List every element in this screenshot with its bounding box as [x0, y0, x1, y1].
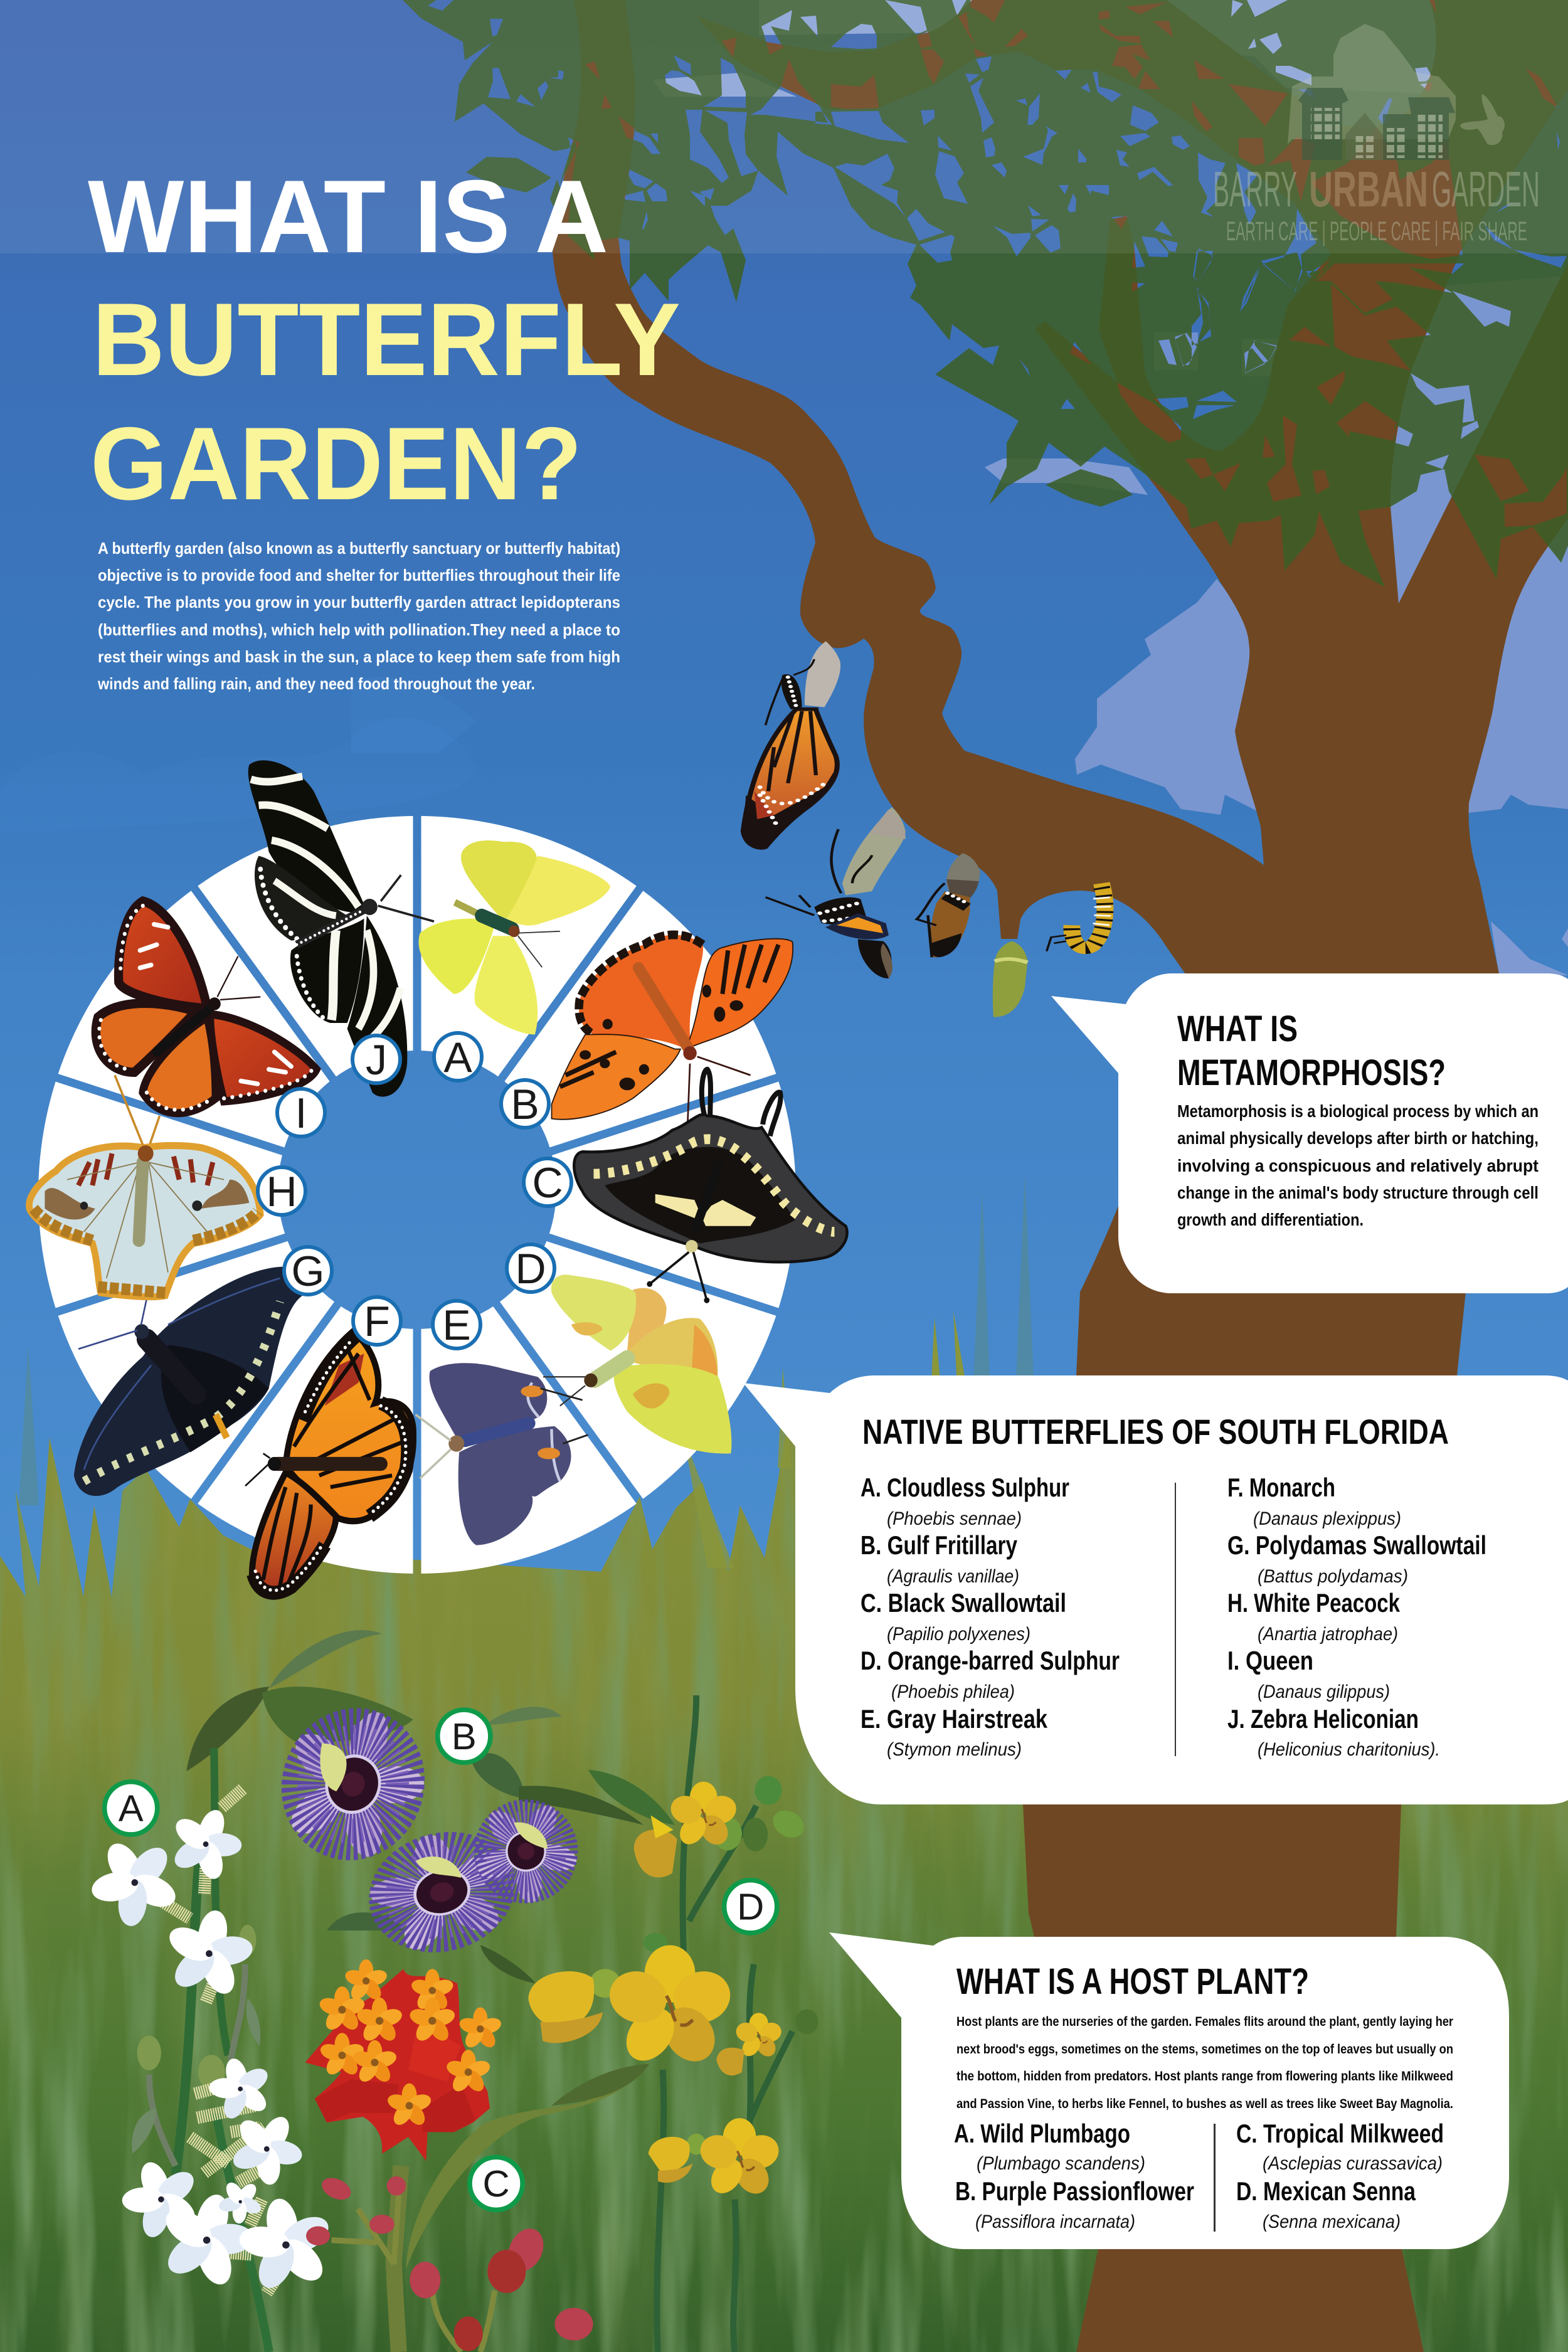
plant C: tropical milkweed: [305, 1959, 649, 2352]
butterfly names, left column: B. Gulf Fritillary: [861, 1530, 1018, 1560]
clouds: [0, 0, 1568, 975]
stage: butterfly leaving dark chrysalis: [917, 853, 980, 957]
host plant latin names: (Passiflora incarnata): [975, 2212, 1135, 2232]
latin names, right column: [1253, 1508, 1440, 1760]
intro paragraph: (butterflies and moths), which help with pollination.They need a place to: [98, 620, 620, 639]
host plant body text: Host plants are the nurseries of the garden. Females flits around the plant, gently laying her: [956, 2015, 1453, 2029]
host column divider: [1214, 2124, 1216, 2232]
wheel letter badges: [258, 1033, 571, 1348]
wheel letters: [266, 1034, 563, 1349]
host plant body text: next brood's eggs, sometimes on the stems, sometimes on the top of leaves but usually on: [956, 2042, 1453, 2057]
plant D: mexican senna: [528, 1695, 818, 2352]
butterfly names, left column: D. Orange-barred Sulphur: [861, 1646, 1120, 1675]
callout: native butterflies of south florida: [743, 1375, 1568, 1804]
plant badge B: [438, 1710, 490, 1762]
metamorphosis heading: WHAT IS: [1177, 1009, 1298, 1049]
butterfly wheel: [0, 760, 847, 1599]
metamorphosis life cycle stages on branch: [743, 641, 1105, 1017]
metamorphosis heading: [1177, 1009, 1446, 1093]
metamorphosis body text: [1177, 1101, 1539, 1229]
plant badge A: A: [119, 1788, 144, 1830]
butterfly names, right column: G. Polydamas Swallowtail: [1227, 1530, 1486, 1560]
butterflies placed around wheel: [29, 760, 847, 1594]
title: [88, 159, 681, 521]
butterfly B: gulf fritillary: [552, 935, 793, 1121]
intro paragraph: cycle. The plants you grow in your butterfly garden attract lepidopterans: [98, 593, 620, 612]
butterfly G: polydamas swallowtail: [74, 1267, 302, 1496]
butterfly C: black swallowtail: [574, 1069, 847, 1303]
tree trunk and branches: [553, 0, 1568, 2352]
host plant names: D. Mexican Senna: [1236, 2176, 1416, 2206]
plant badge B: B: [452, 1715, 477, 1757]
butterfly names, right column: J. Zebra Heliconian: [1227, 1704, 1419, 1734]
host plant heading: WHAT IS A HOST PLANT?: [956, 1961, 1309, 2002]
host plant names: C. Tropical Milkweed: [1236, 2119, 1444, 2148]
plant B: purple passionflower: [186, 1630, 644, 1983]
host plant latin names: (Plumbago scandens): [977, 2153, 1145, 2174]
butterfly names, right column: H. White Peacock: [1227, 1588, 1401, 1618]
metamorphosis body text: growth and differentiation.: [1177, 1210, 1364, 1229]
wheel letters: F: [364, 1298, 390, 1345]
latin names, right column: (Anartia jatrophae): [1258, 1624, 1398, 1645]
title: WHAT IS A: [88, 159, 608, 274]
butterfly H: white peacock: [29, 1075, 260, 1297]
milkweed red petals: [305, 1969, 490, 2161]
butterfly names, right column: F. Monarch: [1227, 1473, 1335, 1502]
logo icon: tree, buildings and butterfly: [1288, 24, 1505, 160]
title: BUTTERFLY: [92, 282, 681, 397]
latin names, right column: (Danaus plexippus): [1253, 1508, 1401, 1529]
host plant names: B. Purple Passionflower: [955, 2176, 1194, 2206]
intro paragraph: [97, 539, 620, 693]
butterfly names, right column: [1227, 1473, 1486, 1734]
butterfly names, left column: E. Gray Hairstreak: [861, 1704, 1048, 1734]
latin names, left column: (Agraulis vanillae): [887, 1566, 1019, 1587]
plant badge C: [470, 2157, 522, 2210]
host plant latin names: [975, 2153, 1443, 2232]
stage: butterfly emerging from chrysalis: [766, 807, 906, 978]
wheel letters: H: [266, 1168, 297, 1216]
intro paragraph: winds and falling rain, and they need food throughout the year.: [97, 674, 535, 693]
wheel letters: J: [366, 1036, 387, 1084]
latin names, left column: [887, 1508, 1030, 1760]
butterfly names, left column: [861, 1473, 1120, 1734]
watermark logo: Barry Urban Garden: [1213, 24, 1540, 246]
butterfly E: gray hairstreak: [416, 1363, 588, 1545]
passionflower leaves: [186, 1630, 644, 1983]
host plants illustration: [73, 1630, 818, 2352]
wheel letters: A: [443, 1034, 472, 1081]
plant badge D: [724, 1880, 777, 1933]
butterfly F: monarch: [245, 1332, 413, 1594]
latin names, left column: (Papilio polyxenes): [887, 1624, 1030, 1645]
host plant names: A. Wild Plumbago: [954, 2119, 1130, 2148]
butterfly names, right column: I. Queen: [1227, 1646, 1313, 1675]
intro paragraph: objective is to provide food and shelter for butterflies throughout their life: [98, 566, 620, 585]
stage: caterpillar in J shape: [1047, 883, 1105, 951]
logo wordmark: [1213, 161, 1540, 217]
grass meadow background: [0, 1173, 1568, 2352]
butterfly I: queen: [96, 901, 316, 1113]
plant badge C: C: [483, 2163, 510, 2205]
host plant latin names: (Senna mexicana): [1263, 2212, 1401, 2232]
logo wordmark: BARRY: [1213, 161, 1297, 217]
wheel letters: D: [515, 1245, 546, 1293]
translucent top band: [0, 0, 1568, 253]
latin names, left column: (Phoebis philea): [891, 1682, 1015, 1702]
plant badge A: [105, 1782, 157, 1835]
callout: what is a host plant: [829, 1932, 1509, 2249]
intro paragraph: A butterfly garden (also known as a butterfly sanctuary or butterfly habitat): [98, 539, 620, 558]
host plant latin names: (Asclepias curassavica): [1263, 2153, 1443, 2174]
butterfly names, left column: C. Black Swallowtail: [861, 1588, 1066, 1618]
stage: adult monarch on empty chrysalis: [743, 641, 840, 848]
wheel letters: B: [511, 1081, 539, 1128]
latin names, right column: (Battus polydamas): [1258, 1566, 1408, 1587]
host plant body text: [956, 2015, 1453, 2111]
butterfly names, left column: A. Cloudless Sulphur: [861, 1473, 1069, 1502]
wheel letters: G: [292, 1248, 324, 1295]
latin names, left column: (Stymon melinus): [887, 1739, 1022, 1760]
title: GARDEN?: [90, 406, 582, 521]
plant badge D: D: [737, 1885, 764, 1927]
latin names, right column: (Danaus gilippus): [1258, 1682, 1390, 1702]
butterfly J: zebra heliconian: [248, 760, 434, 1097]
logo wordmark: URBAN: [1309, 161, 1428, 217]
host plant body text: the bottom, hidden from predators. Host plants range from flowering plants like Milkweed: [956, 2069, 1453, 2084]
tree canopy leaves: [403, 0, 1568, 587]
host plant names: [954, 2119, 1444, 2206]
host plant body text: and Passion Vine, to herbs like Fennel, to bushes as well as trees like Sweet Bay Magnolia.: [956, 2097, 1453, 2111]
wheel letters: I: [295, 1089, 307, 1137]
column divider: [1175, 1483, 1176, 1756]
butterfly A: cloudless sulphur: [418, 840, 610, 1035]
latin names, left column: (Phoebis sennae): [887, 1508, 1022, 1529]
wheel letters: C: [532, 1159, 563, 1207]
intro paragraph: rest their wings and bask in the sun, a place to keep them safe from high: [98, 647, 620, 666]
plant A: wild plumbago: [73, 1748, 342, 2352]
latin names, right column: (Heliconius charitonius).: [1258, 1739, 1440, 1760]
metamorphosis heading: METAMORPHOSIS?: [1177, 1052, 1446, 1093]
stage: green chrysalis: [993, 941, 1027, 1017]
callout: what is metamorphosis: [1051, 973, 1568, 1293]
butterfly D: orange-barred sulphur: [543, 1274, 731, 1454]
wheel letters: E: [442, 1301, 471, 1349]
metamorphosis body text: involving a conspicuous and relatively abrupt: [1177, 1156, 1539, 1175]
